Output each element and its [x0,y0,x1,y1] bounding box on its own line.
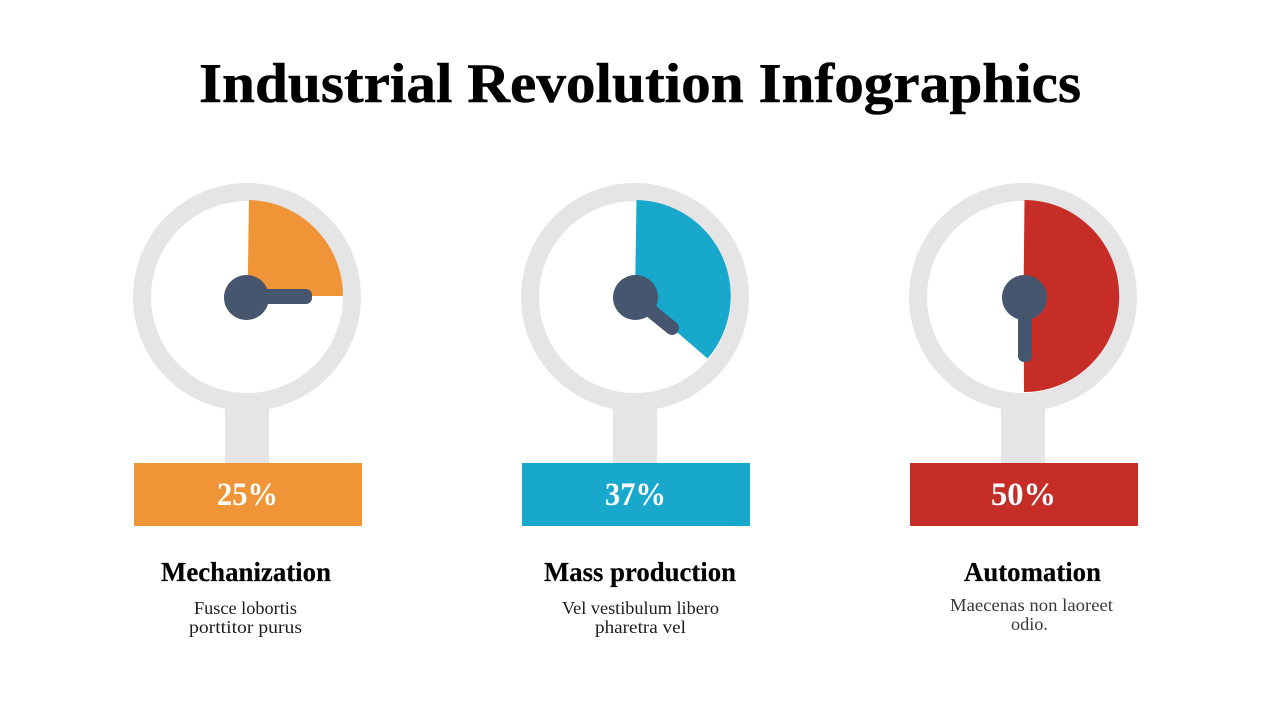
gauge needle [1002,275,1047,362]
value bar 50%: 50% [991,477,1056,513]
gauge ring [142,192,352,402]
body text: Vel vestibulum libero [562,598,719,618]
body text: Maecenas non laoreet [950,595,1113,615]
value bar 37% [522,463,750,526]
gauge stem [1001,400,1045,463]
panel: mass production [522,192,750,637]
heading: Mechanization: Mechanization [161,557,331,587]
gauge wedge 37% [635,200,731,358]
gauge wedge 50% [1024,200,1119,392]
body text: Fusce lobortis [194,598,297,618]
gauge stem [225,400,269,463]
gauge wedge 25% [248,200,343,296]
value bar 25% [134,463,362,526]
gauge stem [613,400,657,463]
heading: Mass production: Mass production [544,557,736,587]
gauge needle [613,275,672,328]
gauge ring [530,192,740,402]
gauge needle [224,275,312,320]
title: Industrial Revolution Infographics [199,53,1081,115]
value bar 25%: 25% [217,477,278,513]
panel: automation [910,192,1138,634]
value bar 37%: 37% [605,477,666,513]
value bar 50% [910,463,1138,526]
body text: porttitor purus [189,617,302,637]
gauge ring [918,192,1128,402]
heading: Automation: Automation [964,557,1101,587]
body text [562,598,719,637]
body text [189,598,302,637]
panel: mechanization [134,192,362,637]
body text: odio. [1011,614,1048,634]
body text [950,595,1113,634]
body text: pharetra vel [595,617,686,637]
